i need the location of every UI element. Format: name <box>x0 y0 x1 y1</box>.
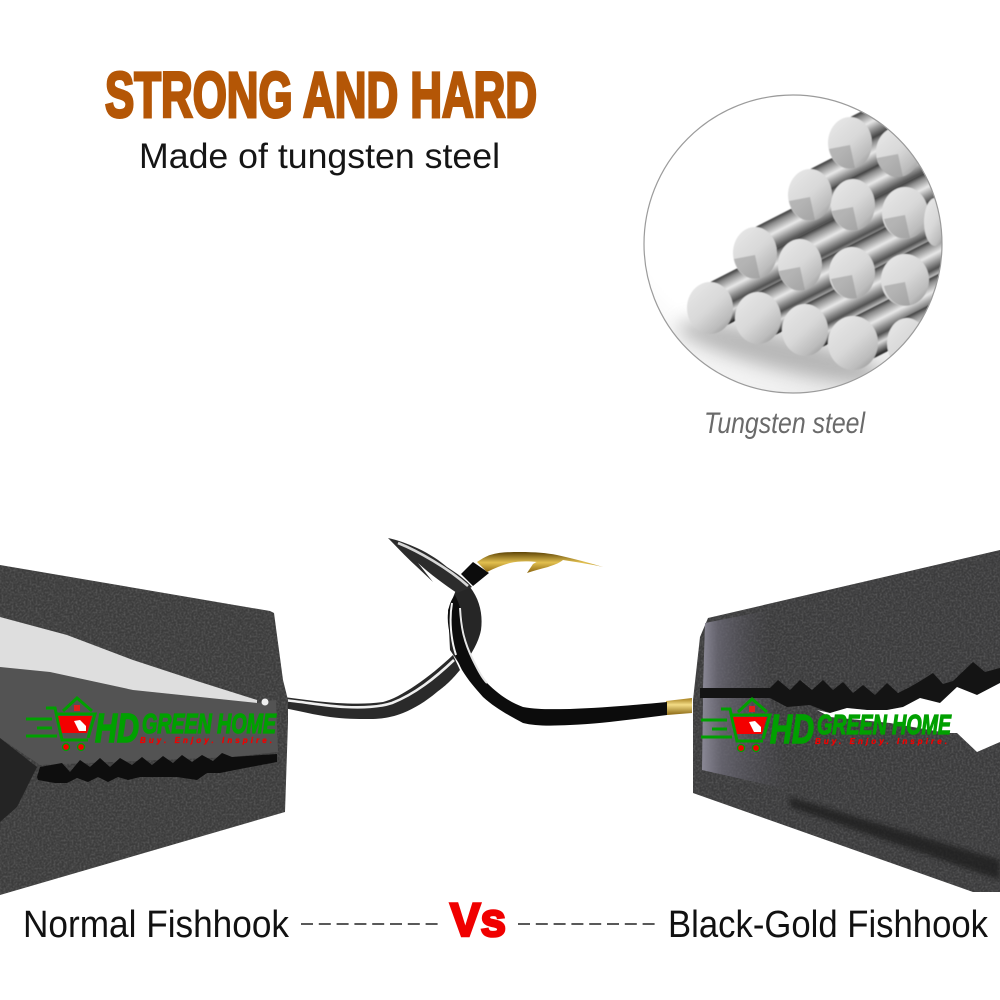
jaw teeth and slot <box>700 662 1000 713</box>
jaw teeth <box>37 753 277 783</box>
logo left <box>26 698 277 751</box>
white gap between jaws <box>817 683 1000 752</box>
logo text: HD <box>770 706 814 752</box>
rod faces <box>828 117 872 169</box>
dashed line left <box>301 923 440 925</box>
gold shank end <box>666 698 692 715</box>
logo text: HD <box>95 705 139 751</box>
rod bodies <box>850 112 888 138</box>
speed lines <box>26 719 57 736</box>
dark interior of pile <box>735 135 960 345</box>
logo right: Buy. Enjoy. Inspire. <box>815 737 947 746</box>
tungsten steel caption: Tungsten steel <box>704 407 866 440</box>
dashed line right <box>518 923 655 925</box>
normal fishhook, grey hook <box>283 538 482 719</box>
left pliers <box>0 565 288 895</box>
speed lines <box>701 720 732 737</box>
tungsten steel rods circle <box>643 94 943 394</box>
right pliers <box>693 550 1000 892</box>
logo left: Buy. Enjoy. Inspire. <box>140 736 272 745</box>
cart <box>46 708 95 740</box>
subtitle: Made of tungsten steel <box>139 137 500 176</box>
title: STRONG AND HARD <box>105 59 537 131</box>
logo right <box>701 699 952 752</box>
cart <box>721 709 770 741</box>
label: normal fishhook: Normal Fishhook <box>23 904 290 946</box>
vs: Vs <box>450 893 506 946</box>
black-gold fishhook <box>448 552 692 726</box>
logo left: GREEN HOME <box>142 708 277 739</box>
face shading wedges <box>829 145 855 169</box>
floor shadow <box>672 312 882 389</box>
gold point <box>477 552 603 573</box>
dark handle shape <box>0 738 37 822</box>
